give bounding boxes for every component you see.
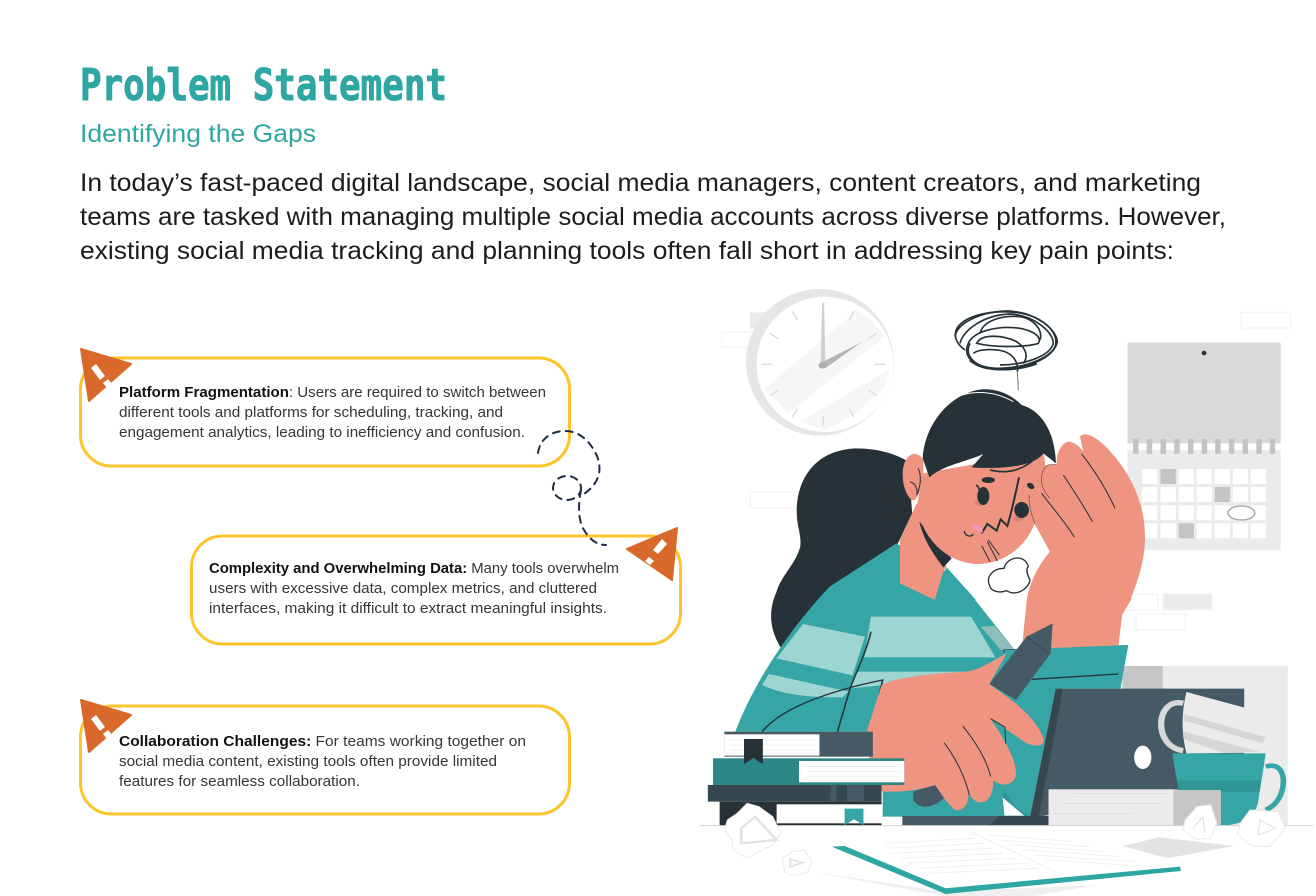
ponytail xyxy=(771,448,912,652)
finger lines xyxy=(944,719,1006,795)
card text 3 xyxy=(119,734,526,790)
desk line xyxy=(700,824,1313,827)
hair xyxy=(923,389,1057,477)
desk scene part one xyxy=(902,645,1288,826)
stylus grip xyxy=(913,785,945,807)
writing hand with stylus xyxy=(867,623,1053,810)
sleeve line xyxy=(1032,674,1118,679)
dashed connector arrow xyxy=(538,431,606,545)
laptop xyxy=(902,689,1244,826)
shirt stripes xyxy=(762,617,995,697)
paper stack on desk xyxy=(1049,789,1221,826)
collar xyxy=(935,567,976,600)
card text 2: users with excessive data, complex metrics, and cluttered xyxy=(209,581,597,597)
card text 1: Platform Fragmentation : Users are required to switch between xyxy=(119,385,546,401)
subtitle: Identifying the Gaps xyxy=(80,120,316,148)
card text 1: engagement analytics, leading to inefficiency and confusion. xyxy=(119,425,525,441)
intro paragraph: In today’s fast-paced digital landscape, social media managers, content creators, and marketing xyxy=(80,169,1201,197)
icon: scribble of stress xyxy=(955,311,1057,390)
warning icon 2 xyxy=(627,528,677,580)
wall background xyxy=(722,289,1291,652)
crumpled paper balls xyxy=(724,803,1285,876)
card text 3: Collaboration Challenges: For teams working together on xyxy=(119,734,526,750)
card: platform fragmentation xyxy=(80,349,570,466)
torso xyxy=(735,543,1128,817)
intro paragraph: existing social media tracking and planning tools often fall short in addressing key pain points: xyxy=(80,237,1174,265)
card text 2: interfaces, making it difficult to extract meaningful insights. xyxy=(209,601,607,617)
head xyxy=(900,389,1145,601)
raised hand xyxy=(1026,434,1145,601)
illustration: stressed woman at desk xyxy=(700,289,1313,896)
open notebook xyxy=(812,832,1234,896)
shirt fold beside laptop xyxy=(1003,787,1029,816)
card: collaboration challenges xyxy=(80,700,570,814)
book stack xyxy=(708,732,904,826)
hand xyxy=(867,653,1044,810)
puff of breath xyxy=(989,558,1030,593)
background paper stack xyxy=(1122,666,1288,825)
warning icon 1 xyxy=(81,349,131,401)
forearm xyxy=(1022,598,1132,650)
neck xyxy=(900,503,947,600)
shirt fold lines xyxy=(762,632,1118,732)
card text 1 xyxy=(119,385,546,441)
facial features xyxy=(964,477,1029,562)
intro paragraph xyxy=(80,169,1226,265)
ear xyxy=(903,454,923,500)
icon: teal mug xyxy=(1172,753,1283,825)
card text 2 xyxy=(209,561,619,617)
icon: wall clock xyxy=(746,289,894,436)
card text 2: Complexity and Overwhelming Data: Many tools overwhelm xyxy=(209,561,619,577)
card: complexity and overwhelming data xyxy=(192,528,680,644)
title: Problem Statement xyxy=(80,60,447,111)
icon: sheet and white mug xyxy=(1161,692,1276,753)
desk scene part two xyxy=(700,692,1313,896)
wall bricks xyxy=(722,312,1291,630)
warning icon 3 xyxy=(81,700,131,752)
card text 3: social media content, existing tools often provide limited xyxy=(119,754,497,770)
face xyxy=(917,452,1045,564)
card text 1: different tools and platforms for scheduling, tracking, and xyxy=(119,405,503,421)
icon: wall calendar xyxy=(1127,343,1281,550)
intro paragraph: teams are tasked with managing multiple social media accounts across diverse platforms. However, xyxy=(80,203,1226,231)
sleeve cuff xyxy=(1004,645,1128,723)
stylus pen xyxy=(989,623,1053,700)
card text 3: features for seamless collaboration. xyxy=(119,774,360,790)
